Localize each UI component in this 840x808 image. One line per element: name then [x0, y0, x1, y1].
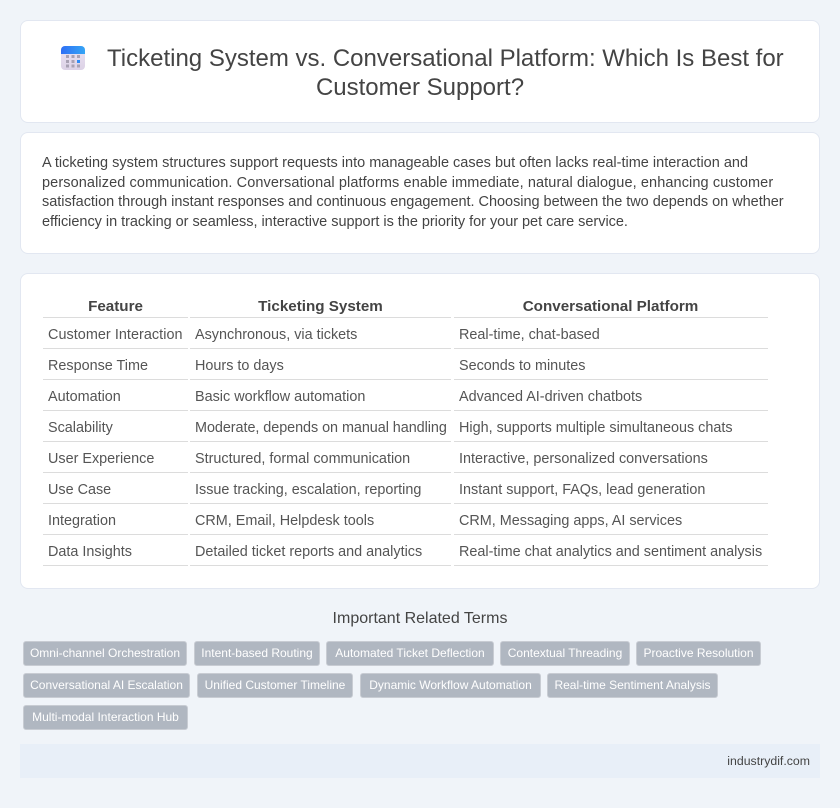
footer source text: industrydif.com: [727, 754, 810, 768]
panel: comparison table: Interactive, personalized conversations: [459, 451, 708, 467]
panel: comparison table: Structured, formal communication: [195, 451, 410, 467]
panel: comparison table: User Experience: [48, 451, 154, 467]
panel: introduction: [20, 132, 820, 254]
tags: related terms: Automated Ticket Deflection: [335, 646, 485, 660]
text block: introduction: efficiency in tracking or seamless, interactive support is the priority for your pet care service.: [42, 214, 628, 230]
panel: comparison table: Asynchronous, via tickets: [195, 327, 357, 343]
panel: comparison table: Hours to days: [195, 358, 284, 374]
panel: comparison table: Detailed ticket reports and analytics: [195, 544, 422, 560]
tags: related terms: [23, 641, 761, 730]
panel: comparison table: Real-time, chat-based: [459, 327, 600, 343]
tags: related terms: Unified Customer Timeline: [205, 678, 345, 692]
panel: comparison table: Moderate, depends on manual handling: [195, 420, 447, 436]
title: Customer Support?: [316, 74, 524, 101]
panel: comparison table: Scalability: [48, 420, 113, 436]
tags: related terms: Real-time Sentiment Analysis: [554, 678, 711, 692]
panel: comparison table: Integration: [48, 513, 116, 529]
panel: comparison table: Advanced AI-driven chatbots: [459, 389, 642, 405]
text block: introduction: satisfaction through instant responses and continuous engagement. Choosing between the two depends on whether: [42, 194, 784, 210]
tags: related terms: Intent-based Routing: [201, 646, 313, 660]
panel: comparison table: Issue tracking, escalation, reporting: [195, 482, 421, 498]
title: [107, 45, 784, 101]
panel: comparison table: Real-time chat analytics and sentiment analysis: [459, 544, 762, 560]
tags: related terms: Conversational AI Escalation: [30, 678, 183, 692]
text block: introduction: [42, 155, 784, 230]
panel: comparison table: Use Case: [48, 482, 111, 498]
panel: comparison table: Data Insights: [48, 544, 132, 560]
panel: comparison table: Automation: [48, 389, 121, 405]
tags: related terms: Contextual Threading: [508, 646, 622, 660]
panel: comparison table: Seconds to minutes: [459, 358, 585, 374]
panel: comparison table: High, supports multiple simultaneous chats: [459, 420, 733, 436]
panel: comparison table: CRM, Messaging apps, AI services: [459, 513, 682, 529]
heading: related terms: Important Related Terms: [333, 610, 507, 627]
tags: related terms: Proactive Resolution: [643, 646, 754, 660]
text block: introduction: A ticketing system structures support requests into manageable cases but often lacks real-time interaction and: [42, 155, 748, 171]
footer bar: [20, 744, 820, 778]
tags: related terms: Dynamic Workflow Automation: [369, 678, 532, 692]
title: Ticketing System vs. Conversational Platform: Which Is Best for: [107, 45, 784, 72]
panel: comparison table: Response Time: [48, 358, 148, 374]
panel: title header: [20, 20, 820, 123]
icon: calendar: [61, 46, 85, 70]
table header: Feature: Feature: [88, 298, 143, 315]
panel: comparison table: Basic workflow automation: [195, 389, 365, 405]
panel: comparison table: Instant support, FAQs, lead generation: [459, 482, 705, 498]
table header: Ticketing System: Ticketing System: [258, 298, 383, 315]
table header: Conversational Platform: Conversational Platform: [523, 298, 698, 315]
panel: comparison table: CRM, Email, Helpdesk tools: [195, 513, 374, 529]
row: Customer Interaction: Customer Interaction: [48, 327, 183, 343]
tags: related terms: Multi-modal Interaction Hub: [32, 710, 179, 724]
text block: introduction: personalized communication. Conversational platforms enable immediate, natural dialogue, enhancing customer: [42, 175, 773, 191]
tags: related terms: Omni-channel Orchestration: [30, 646, 180, 660]
panel: comparison table: [20, 273, 820, 589]
